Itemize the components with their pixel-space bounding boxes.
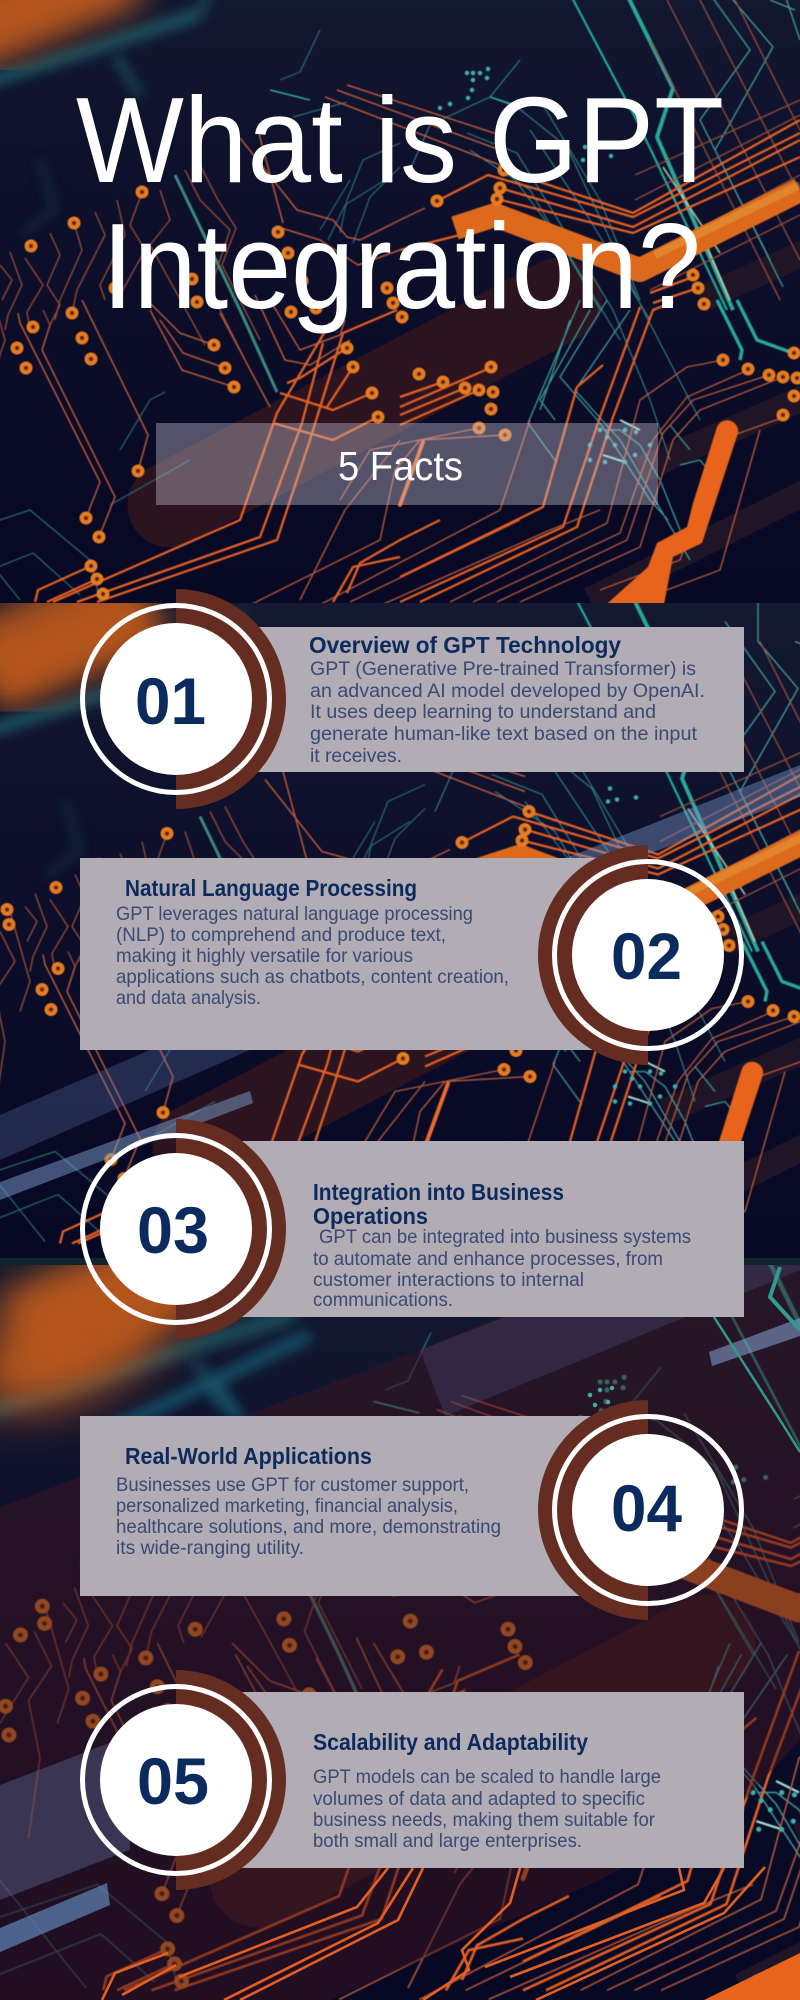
badge 01: 01 (135, 664, 206, 738)
body 05 (313, 1766, 661, 1852)
badge 03 (82, 1119, 286, 1339)
body 03: to automate and enhance processes, from (313, 1248, 663, 1270)
body 02: and data analysis. (116, 987, 261, 1009)
heading 02: Natural Language Processing (125, 875, 417, 901)
badge 03: 03 (137, 1193, 209, 1267)
body 05: GPT models can be scaled to handle large (313, 1766, 661, 1788)
body 04: healthcare solutions, and more, demonstrating (116, 1516, 501, 1538)
heading 05: Scalability and Adaptability (313, 1729, 588, 1755)
body 01: it receives. (310, 745, 402, 767)
subtitle banner (156, 423, 658, 505)
body 04 (116, 1474, 501, 1559)
badge 05: 05 (137, 1744, 209, 1818)
body 03: GPT can be integrated into business systems (319, 1226, 691, 1248)
body 02: applications such as chatbots, content creation, (116, 966, 509, 988)
body 01: GPT (Generative Pre-trained Transformer) is (310, 658, 696, 680)
body 04: its wide-ranging utility. (116, 1537, 304, 1559)
body 01: It uses deep learning to understand and (310, 701, 656, 723)
body 02 (116, 903, 509, 1009)
background: circuit board tile 3 (0, 1190, 800, 2000)
background: circuit board tile 2 (0, 603, 800, 1245)
body 05: both small and large enterprises. (313, 1830, 582, 1852)
panel: fact 01 (82, 589, 744, 809)
background: seam strip (0, 1258, 800, 1265)
body 05: volumes of data and adapted to specific (313, 1788, 645, 1810)
body 02: GPT leverages natural language processing (116, 903, 473, 925)
badge 05 (82, 1670, 286, 1890)
heading 03: Operations (313, 1203, 428, 1229)
card 01 (176, 627, 744, 772)
card 02 (80, 858, 648, 1050)
card 05 (176, 1692, 744, 1868)
badge 04: 04 (611, 1471, 682, 1545)
body 01: generate human-like text based on the input (310, 723, 698, 745)
heading 04: Real-World Applications (125, 1443, 372, 1469)
body 03: communications. (313, 1289, 453, 1311)
body 05: business needs, making them suitable for (313, 1809, 655, 1831)
body 01 (310, 658, 705, 767)
body 01: an advanced AI model developed by OpenAI. (310, 680, 705, 702)
badge 04 (538, 1400, 742, 1620)
card 03 (176, 1141, 744, 1317)
body 02: (NLP) to comprehend and produce text, (116, 924, 446, 946)
badge 01 (82, 589, 286, 809)
body 02: making it highly versatile for various (116, 945, 413, 967)
heading 01: Overview of GPT Technology (309, 632, 621, 658)
body 03 (313, 1226, 691, 1311)
body 04: Businesses use GPT for customer support, (116, 1474, 469, 1496)
panel: fact 03 (82, 1119, 744, 1339)
heading 03: Integration into Business (313, 1179, 564, 1205)
badge 02 (538, 845, 742, 1065)
heading 03 (313, 1179, 564, 1229)
body 04: personalized marketing, financial analysis, (116, 1495, 458, 1517)
panel: fact 05 (82, 1670, 744, 1890)
title (76, 72, 724, 334)
badge 02: 02 (611, 919, 682, 993)
title: Integration? (102, 198, 701, 334)
title: What is GPT (76, 72, 724, 208)
background: circuit board tile 1 (0, 0, 800, 670)
panel: fact 02 (80, 845, 742, 1065)
panel: fact 04 (80, 1400, 742, 1620)
body 03: customer interactions to internal (313, 1269, 584, 1291)
subtitle banner: 5 Facts (338, 443, 463, 489)
card 04 (80, 1416, 648, 1596)
